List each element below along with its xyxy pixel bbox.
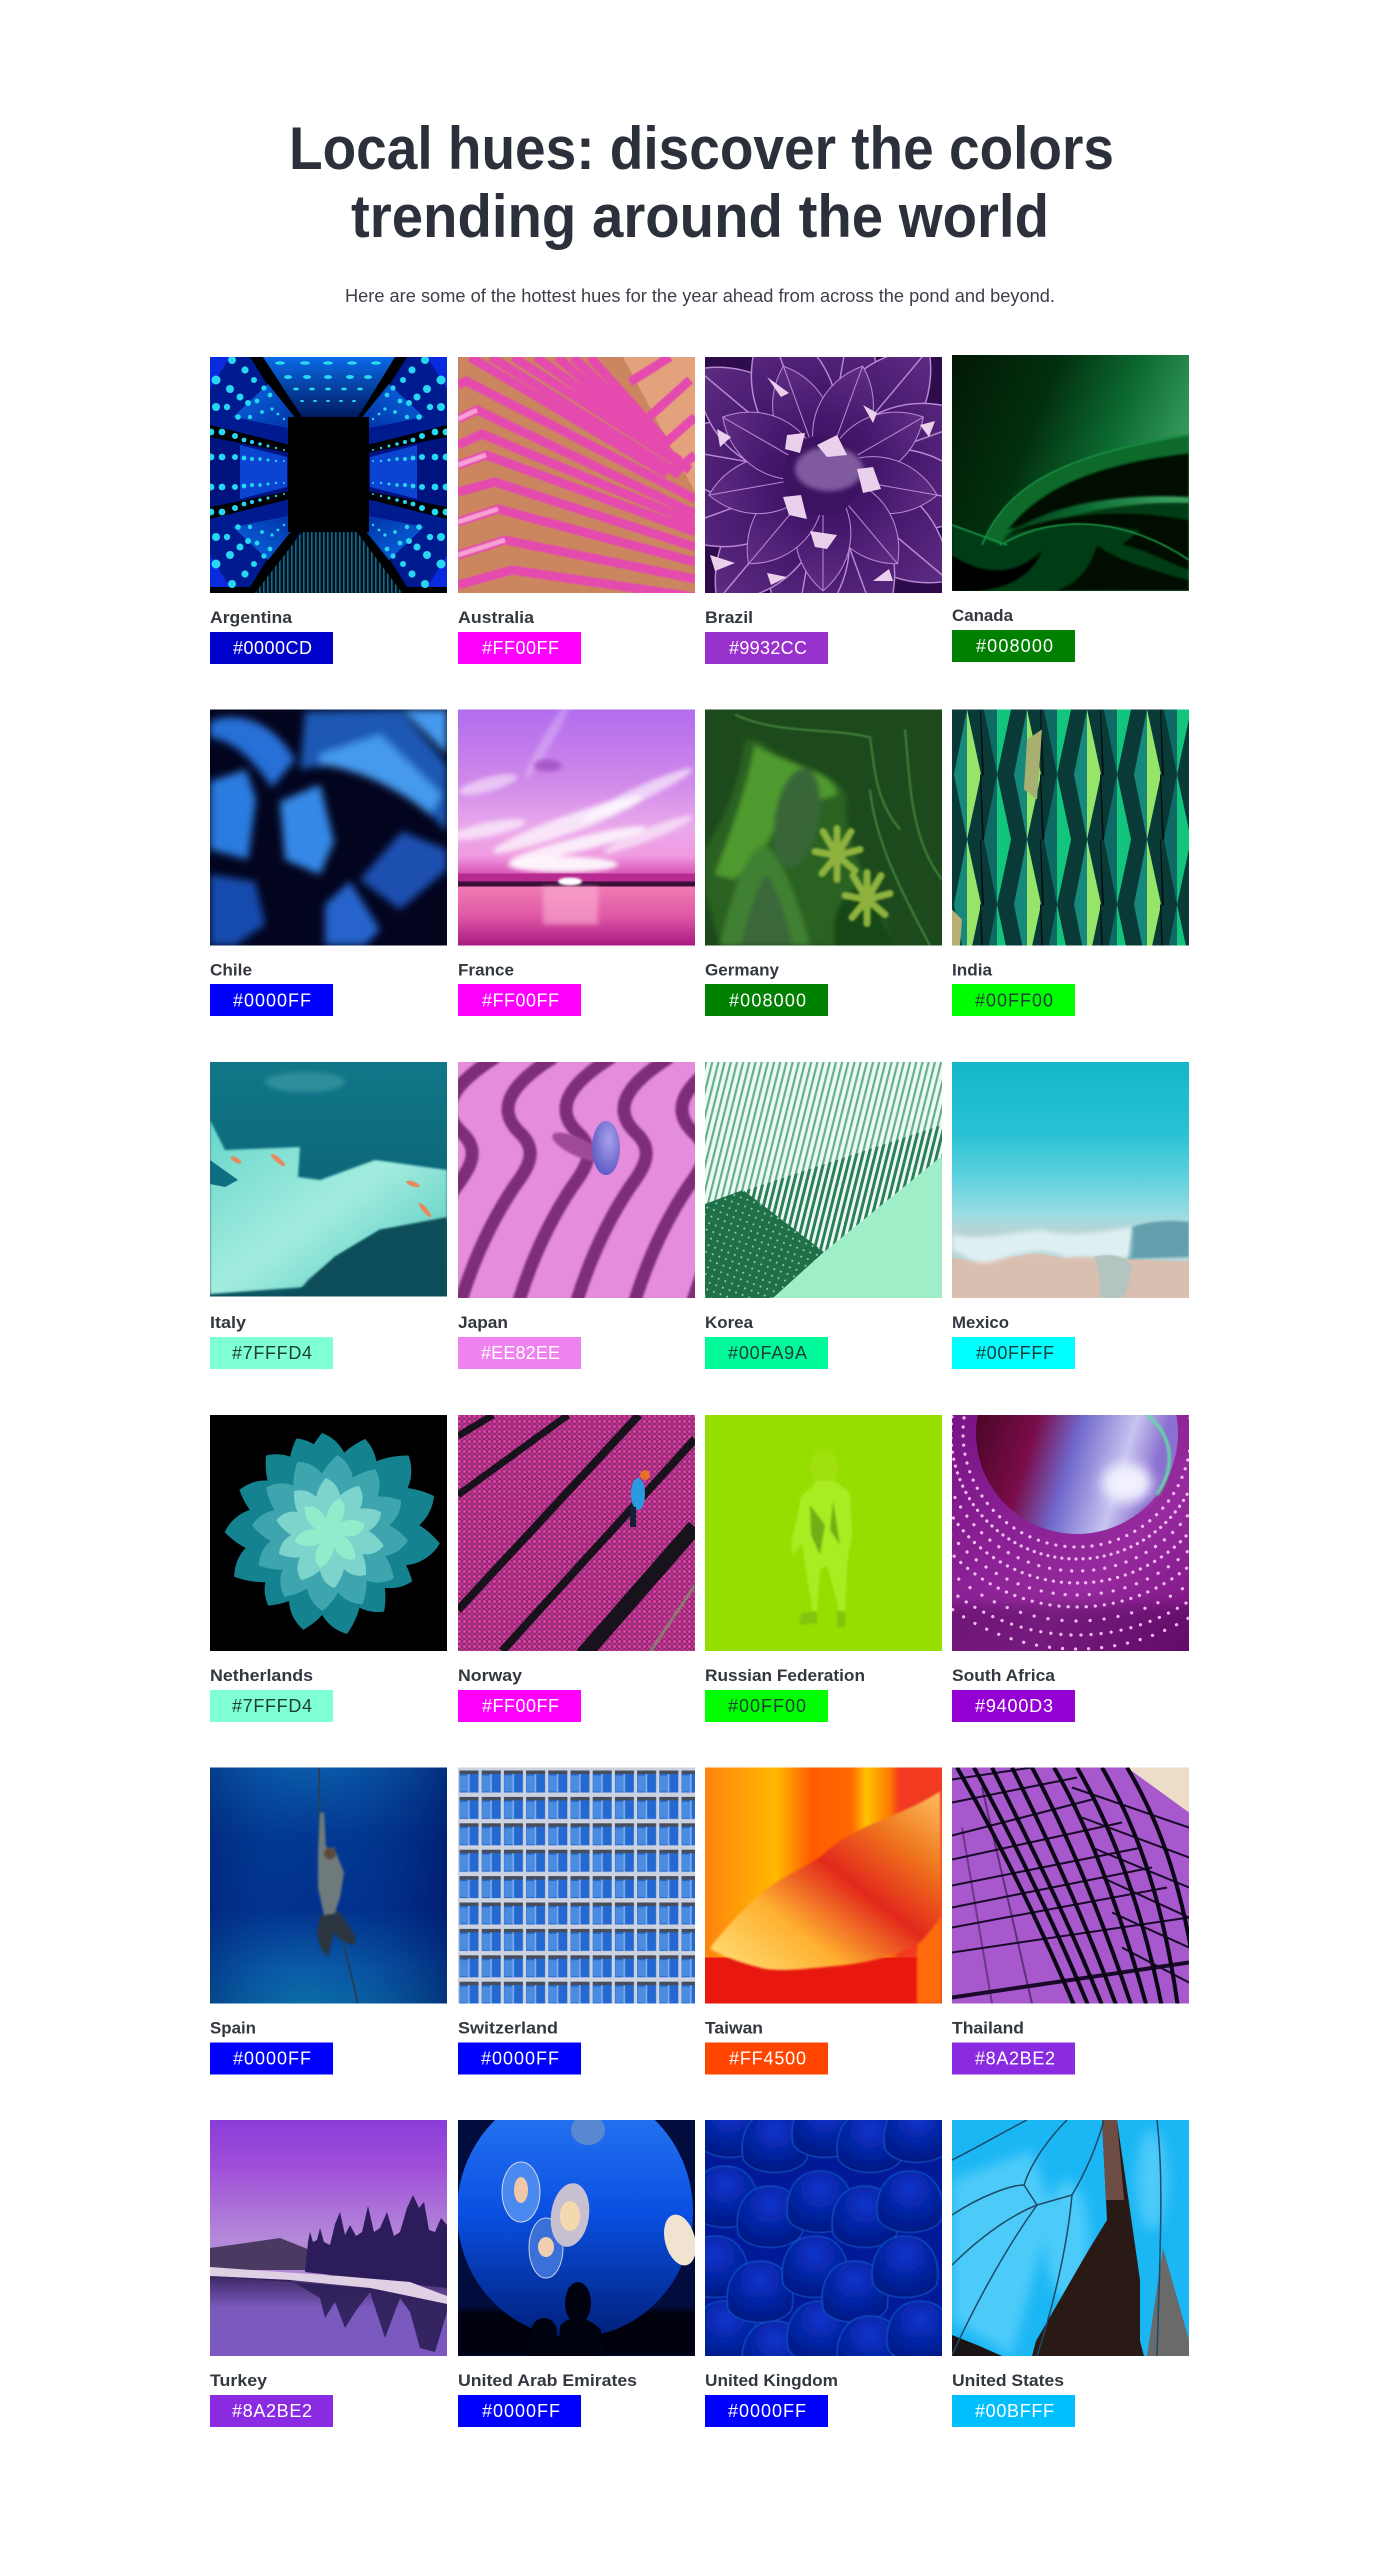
swatch: #FF00FF: #FF00FF	[482, 1696, 559, 1716]
label: Norway: Norway	[458, 1666, 523, 1685]
image: pink sand ripples with blue egg	[458, 1062, 695, 1298]
image: orange and red tulip petal	[705, 1768, 942, 2004]
label: Switzerland: Switzerland	[458, 2018, 558, 2038]
panel: Canada	[952, 355, 1189, 662]
panel: South Africa	[861, 1217, 1293, 1722]
label: United States: United States	[952, 2371, 1064, 2390]
subtitle: Here are some of the hottest hues for the year ahead from across the pond and beyond.	[345, 286, 1055, 306]
panel: Australia	[458, 357, 695, 664]
panel: United Arab Emirates	[457, 2087, 701, 2427]
swatch: #8A2BE2	[210, 2395, 333, 2427]
swatch: #0000FF	[458, 2042, 581, 2074]
image: green satin	[952, 355, 1189, 591]
panel: Russian Federation	[705, 1415, 942, 1722]
label: Japan: Japan	[458, 1313, 508, 1332]
swatch: #7FFFD4	[210, 1690, 333, 1722]
image: jellyfish aquarium with silhouettes	[458, 2120, 695, 2356]
label: South Africa: South Africa	[952, 1666, 1056, 1685]
image: pink sunset over water	[458, 710, 695, 946]
swatch: #FF00FF: #FF00FF	[482, 638, 559, 658]
title: trending around the world	[351, 183, 1049, 250]
swatch: #00BFFF: #00BFFF	[975, 2401, 1054, 2421]
image: purple succulent	[705, 357, 942, 593]
image: blue window grid facade	[458, 1768, 695, 2004]
label: Turkey: Turkey	[210, 2371, 268, 2390]
label: Argentina: Argentina	[210, 608, 293, 627]
swatch: #00FF00	[705, 1690, 828, 1722]
label: Brazil: Brazil	[705, 608, 753, 627]
image: purple glass facade with black grid	[952, 1768, 1189, 2004]
panel: Germany	[705, 710, 942, 1016]
image: green stripes and mint paper	[705, 1062, 942, 1298]
panel: Chile	[210, 710, 447, 1016]
swatch: #FF00FF: #FF00FF	[482, 990, 559, 1010]
label: Russian Federation: Russian Federation	[705, 1666, 865, 1685]
swatch: #00FA9A	[705, 1337, 828, 1369]
panel: Norway	[458, 1415, 695, 1722]
label: Mexico: Mexico	[952, 1313, 1009, 1332]
swatch: #EE82EE	[458, 1337, 581, 1369]
label: Spain: Spain	[210, 2018, 256, 2038]
image: tulip field rows with person	[458, 1415, 695, 1651]
label: Australia: Australia	[458, 608, 535, 627]
swatch: #7FFFD4: #7FFFD4	[232, 1696, 312, 1716]
title: Local hues: discover the colors	[289, 115, 1114, 182]
swatch: #00FF00	[952, 984, 1075, 1016]
swatch: #00FF00: #00FF00	[975, 990, 1053, 1010]
label: Chile: Chile	[210, 960, 252, 980]
image: blue LED tunnel	[210, 357, 447, 593]
image: turquoise beach from above	[952, 1062, 1189, 1298]
panel: France	[449, 698, 695, 1016]
image: aerial rice terraces with palms	[705, 710, 942, 946]
panel: India	[952, 710, 1189, 1016]
label: United Arab Emirates: United Arab Emirates	[458, 2371, 637, 2390]
swatch: #0000FF: #0000FF	[482, 2401, 560, 2421]
swatch: #0000FF: #0000FF	[233, 2048, 311, 2068]
swatch: #9932CC	[705, 632, 828, 664]
label: Canada: Canada	[952, 606, 1014, 625]
swatch: #008000: #008000	[729, 990, 806, 1010]
panel: Argentina	[208, 356, 449, 664]
image: teal paper flower	[210, 1415, 447, 1651]
label: Korea: Korea	[705, 1313, 754, 1332]
swatch: #0000FF: #0000FF	[728, 2401, 806, 2421]
swatch: #8A2BE2	[952, 2042, 1075, 2074]
swatch: #EE82EE: #EE82EE	[481, 1343, 560, 1363]
panel: Netherlands	[210, 1415, 447, 1722]
image: blue feathers	[705, 2120, 942, 2356]
panel: Korea	[705, 1062, 942, 1369]
swatch: #00FFFF	[952, 1337, 1075, 1369]
swatch: #00FA9A: #00FA9A	[728, 1343, 807, 1363]
label: Germany: Germany	[705, 960, 780, 980]
image: freediver on rope underwater	[210, 1768, 447, 2004]
swatch: #00BFFF	[952, 2395, 1075, 2427]
panel: Thailand	[952, 1768, 1194, 2074]
image: lime green astronaut	[705, 1415, 942, 1651]
label: France: France	[458, 960, 514, 980]
swatch: #7FFFD4	[210, 1337, 333, 1369]
swatch: #0000FF	[210, 984, 333, 1016]
swatch: #7FFFD4: #7FFFD4	[232, 1343, 312, 1363]
swatch: #008000	[952, 630, 1075, 662]
swatch: #8A2BE2: #8A2BE2	[232, 2401, 312, 2421]
image: pink and orange ridged facade	[458, 357, 695, 593]
swatch: #9400D3: #9400D3	[975, 1696, 1053, 1716]
swatch: #008000	[705, 984, 828, 1016]
swatch: #00FF00: #00FF00	[728, 1696, 806, 1716]
panel: Spain	[210, 1768, 447, 2074]
label: Thailand: Thailand	[952, 2018, 1024, 2038]
swatch: #9932CC: #9932CC	[729, 638, 807, 658]
panel: Turkey	[210, 2120, 447, 2427]
image: blue butterfly wing	[952, 2120, 1189, 2356]
title	[289, 115, 1114, 250]
swatch: #0000FF: #0000FF	[481, 2048, 559, 2068]
swatch: #0000CD	[210, 632, 333, 664]
swatch: #008000: #008000	[976, 636, 1053, 656]
swatch: #FF4500	[705, 2042, 828, 2074]
label: India: India	[952, 960, 993, 980]
panel: United Kingdom	[682, 2096, 953, 2427]
swatch: #FF4500: #FF4500	[729, 2048, 806, 2068]
swatch: #9400D3	[952, 1690, 1075, 1722]
panel: Mexico	[952, 1062, 1189, 1369]
label: Italy: Italy	[210, 1313, 247, 1332]
label: Netherlands: Netherlands	[210, 1666, 313, 1685]
swatch: #0000FF: #0000FF	[233, 990, 311, 1010]
image: green geometric facade	[952, 710, 1189, 946]
swatch: #00FFFF: #00FFFF	[976, 1343, 1054, 1363]
swatch: #8A2BE2: #8A2BE2	[975, 2048, 1055, 2068]
panel: Switzerland	[458, 1768, 695, 2074]
label: Taiwan: Taiwan	[705, 2018, 763, 2038]
panel: Brazil	[654, 306, 992, 664]
swatch: #FF00FF	[458, 1690, 581, 1722]
panel: Taiwan	[705, 1768, 942, 2074]
panel: United States	[952, 2120, 1189, 2427]
swatch: #0000FF	[210, 2042, 333, 2074]
image: turquoise sea with swimmers	[210, 1062, 447, 1296]
panel: Italy	[210, 1062, 447, 1369]
panel: Japan	[343, 1057, 786, 1369]
swatch: #0000CD: #0000CD	[233, 638, 312, 658]
image: blue folded ribbons	[210, 710, 447, 946]
image: disco ball over purple light dots	[952, 1415, 1189, 1651]
swatch: #FF00FF	[458, 984, 581, 1016]
swatch: #FF00FF	[458, 632, 581, 664]
swatch: #0000FF	[458, 2395, 581, 2427]
swatch: #0000FF	[705, 2395, 828, 2427]
image: purple lake with pine trees	[210, 2120, 447, 2356]
label: United Kingdom: United Kingdom	[705, 2371, 838, 2390]
